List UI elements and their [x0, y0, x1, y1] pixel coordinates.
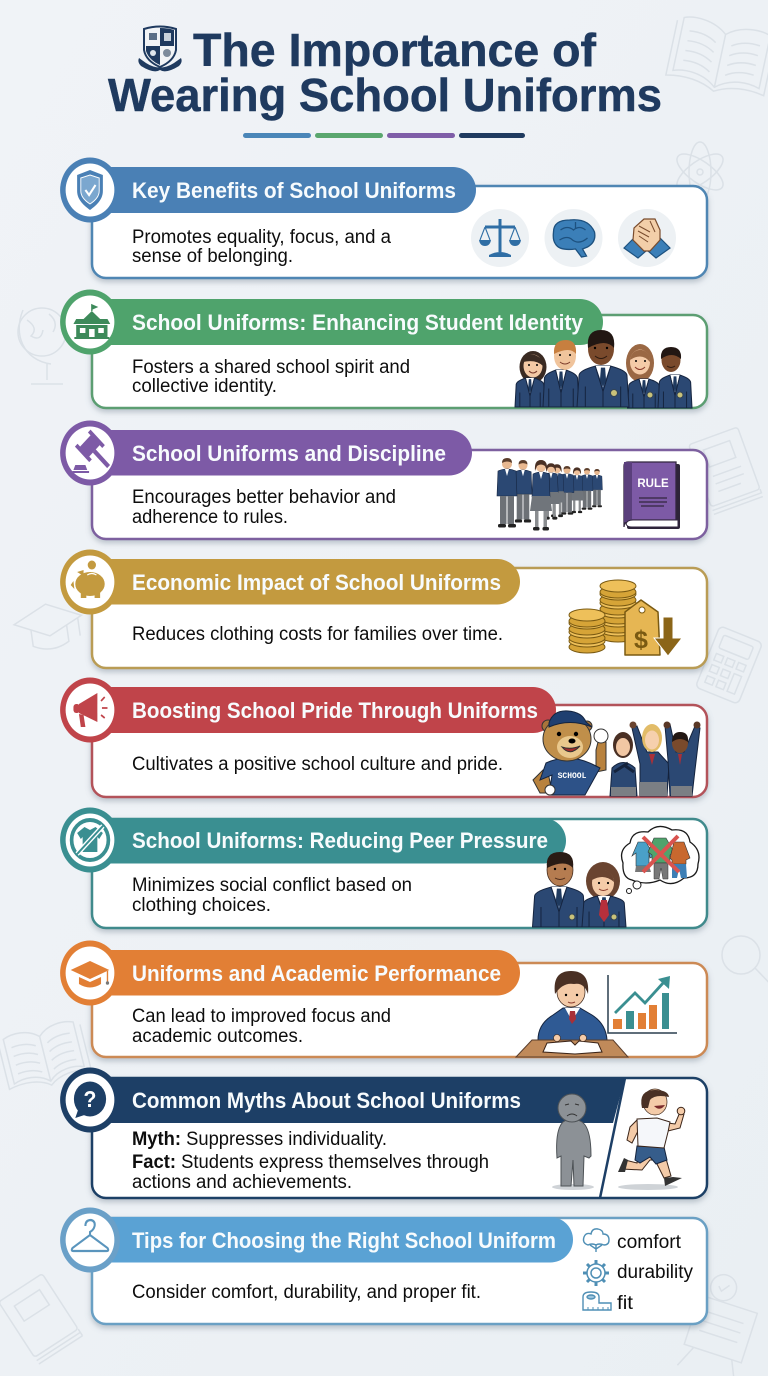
- label: fit: fit: [617, 1293, 634, 1314]
- icon: question bubble: ?: [84, 1086, 96, 1112]
- body text: Minimizes social conflict based on: [132, 875, 412, 896]
- header bar: [80, 950, 520, 996]
- icon: cotton: [584, 1229, 609, 1252]
- body text: Myth: Suppresses individuality.: [132, 1129, 387, 1150]
- card body: [92, 315, 707, 408]
- illustration: student studying: [516, 971, 628, 1057]
- heading: School Uniforms: Enhancing Student Identity: [132, 310, 584, 335]
- panel: school pride: [60, 678, 707, 797]
- heading: Tips for Choosing the Right School Uniform: [132, 1228, 556, 1253]
- body text: collective identity.: [132, 376, 277, 397]
- illustration: two students: [532, 852, 626, 927]
- icon: piggy bank: [60, 550, 120, 614]
- heading: School Uniforms: Reducing Peer Pressure: [132, 828, 548, 853]
- icon: no-clothing sign: [60, 808, 120, 872]
- body text: [132, 1006, 391, 1047]
- doodle: graduation cap: [12, 599, 85, 653]
- illustration: thought bubble with crossed-out clothes: [622, 826, 699, 894]
- panel: common myths: [60, 1068, 707, 1198]
- heading: Common Myths About School Uniforms: [132, 1088, 521, 1113]
- icon: school building: [60, 290, 120, 354]
- doodle: notebook right: [689, 427, 763, 514]
- card body: [92, 705, 707, 797]
- body text: academic outcomes.: [132, 1026, 303, 1047]
- doodle: open book top right: [665, 14, 768, 102]
- illustration: cheering students: [610, 722, 700, 796]
- body text: Can lead to improved focus and: [132, 1006, 391, 1027]
- chart: rising bars with arrow: [608, 975, 677, 1033]
- doodle: globe: [18, 308, 66, 384]
- illustration: five students: [515, 330, 692, 408]
- panel: academic performance: [60, 940, 707, 1057]
- label: durability: durability: [617, 1262, 693, 1283]
- body text: Reduces clothing costs for families over time.: [132, 624, 503, 645]
- header bar: [80, 430, 472, 476]
- icon: brain: [544, 209, 602, 267]
- illustration: line of students: [497, 458, 602, 530]
- doodle: open book left: [0, 1018, 92, 1095]
- body text: [132, 875, 412, 916]
- heading: Uniforms and Academic Performance: [132, 961, 501, 986]
- icon: question bubble: [60, 1068, 120, 1132]
- header bar: [80, 687, 556, 733]
- card body: [92, 963, 707, 1057]
- body text: Promotes equality, focus, and a: [132, 227, 391, 248]
- doodle: notebook bottom right: [677, 1269, 766, 1376]
- label: comfort: comfort: [617, 1232, 682, 1253]
- body text: Fact: Students express themselves through: [132, 1152, 489, 1173]
- slanted divider: [600, 1078, 625, 1198]
- title divider: [243, 133, 525, 138]
- illustration: running boy: [618, 1089, 685, 1190]
- icon: scales: [471, 209, 529, 267]
- body text: sense of belonging.: [132, 246, 293, 267]
- illustration: sad gray figure: [552, 1094, 594, 1190]
- icon: graduation cap: [60, 940, 120, 1006]
- card body: [92, 450, 707, 539]
- icon: megaphone: [60, 678, 120, 742]
- card body: [92, 1078, 707, 1198]
- header bar: [80, 559, 520, 604]
- body text: [132, 357, 410, 397]
- title: Wearing School Uniforms: [108, 69, 662, 121]
- illustration: bear mascot: SCHOOL: [558, 772, 587, 781]
- illustration: rule book: RULE: [637, 478, 669, 490]
- panel: key benefits: [60, 158, 707, 278]
- body text: Cultivates a positive school culture and pride.: [132, 754, 503, 775]
- header bar: [80, 1217, 573, 1262]
- body text: clothing choices.: [132, 895, 271, 916]
- doodle: calculator: [695, 626, 763, 704]
- title: [108, 24, 662, 121]
- heading: Economic Impact of School Uniforms: [132, 570, 501, 595]
- body text: [132, 1129, 489, 1193]
- body text: [132, 487, 396, 528]
- heading: Key Benefits of School Uniforms: [132, 178, 456, 203]
- doodle: atom: [672, 142, 728, 202]
- header bar: [80, 1078, 625, 1123]
- icon: measuring tape: [583, 1292, 611, 1310]
- illustration: bear mascot: [533, 711, 608, 795]
- icon: handshake: [618, 209, 676, 267]
- panel: student identity: [60, 290, 707, 408]
- illustration: rule book: [624, 462, 680, 529]
- card body: [92, 819, 707, 928]
- doodle: magnifier: [722, 936, 768, 991]
- doodle: book left: [0, 1274, 83, 1364]
- heading: School Uniforms and Discipline: [132, 441, 446, 466]
- card body: [92, 568, 707, 668]
- body text: [132, 227, 391, 267]
- illustration: coins and price tag: $: [634, 626, 648, 654]
- header bar: [80, 818, 566, 864]
- header bar: [80, 167, 476, 213]
- body text: actions and achievements.: [132, 1172, 352, 1193]
- panel: economic impact: [60, 550, 707, 668]
- title: The Importance of: [193, 24, 597, 76]
- card body: [92, 186, 707, 278]
- body text: Fosters a shared school spirit and: [132, 357, 410, 378]
- icon: school crest: [138, 26, 182, 71]
- icon: gavel: [60, 420, 120, 486]
- icon: gear: [583, 1260, 609, 1286]
- body text: Consider comfort, durability, and proper fit.: [132, 1282, 481, 1303]
- icon: hanger: [60, 1208, 120, 1272]
- body text: Encourages better behavior and: [132, 487, 396, 508]
- panel: peer pressure: [60, 808, 707, 928]
- panel: discipline: [60, 420, 707, 539]
- body text: adherence to rules.: [132, 507, 288, 528]
- panel: tips: [60, 1208, 707, 1324]
- illustration: coins and price tag: [569, 580, 682, 656]
- icon: shield: [60, 158, 120, 222]
- header bar: [80, 299, 603, 345]
- card body: [92, 1218, 707, 1324]
- heading: Boosting School Pride Through Uniforms: [132, 698, 538, 723]
